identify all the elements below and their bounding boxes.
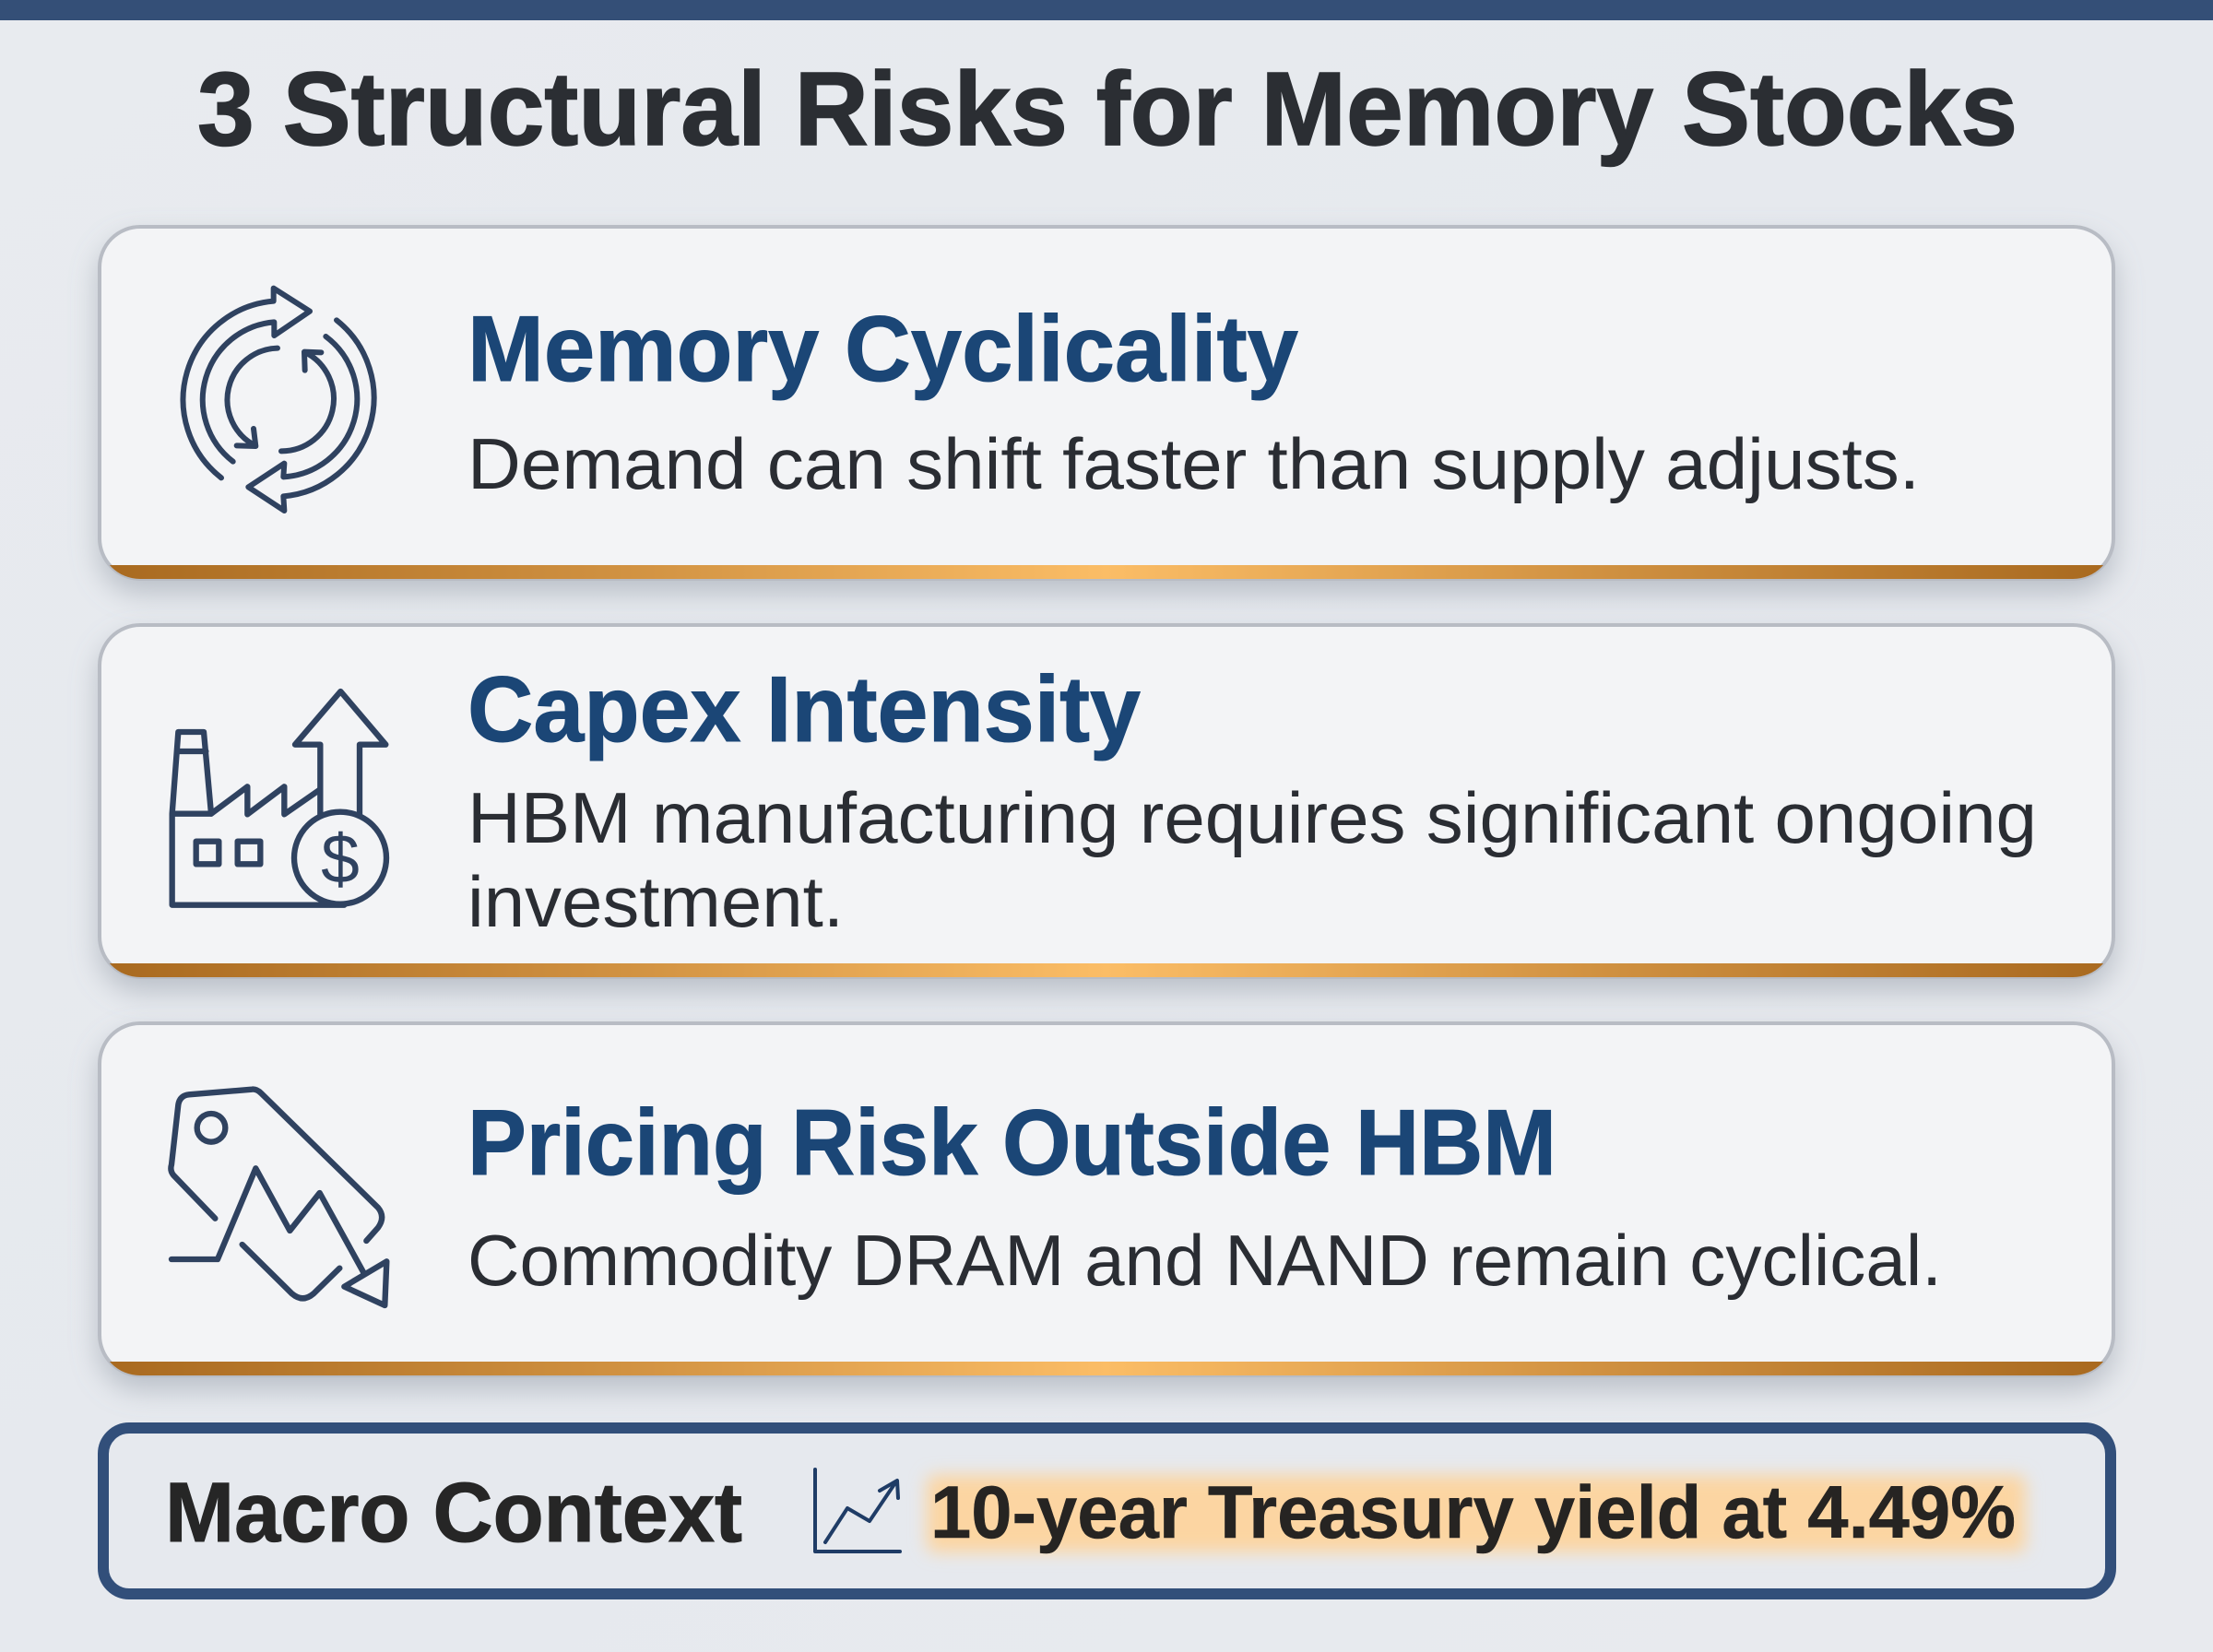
panel: macro context [103, 1428, 2111, 1594]
icon: cycle arrows [183, 289, 374, 511]
heading: pricing risk outside HBM: Pricing Risk Outside HBM [467, 1092, 1556, 1195]
icon: factory with rising cost [172, 691, 386, 905]
icon: line chart [815, 1469, 900, 1552]
panel: memory cyclicality [100, 227, 2113, 580]
callout: treasury yield: 10-year Treasury yield at 4.49% [930, 1471, 2016, 1554]
icon: price tag with falling line [171, 1090, 386, 1305]
panel: capex intensity [100, 625, 2113, 978]
text: memory cyclicality description: Demand can shift faster than supply adjusts. [467, 423, 1920, 504]
panel: pricing risk outside HBM [100, 1023, 2113, 1376]
panel: capex intensity: investment. [467, 861, 844, 942]
text: capex intensity description: HBM manufacturing requires significant ongoing [467, 777, 2037, 858]
title: 3 Structural Risks for Memory Stocks [197, 51, 2018, 167]
heading: memory cyclicality: Memory Cyclicality [467, 298, 1298, 401]
heading: capex intensity: Capex Intensity [467, 658, 1141, 761]
text: pricing risk description: Commodity DRAM and NAND remain cyclical. [467, 1220, 1942, 1301]
top bar [0, 0, 2213, 20]
heading: macro context: Macro Context [165, 1466, 742, 1560]
icon: factory with rising cost: $ [321, 820, 360, 897]
highlight glow [927, 1475, 2026, 1552]
